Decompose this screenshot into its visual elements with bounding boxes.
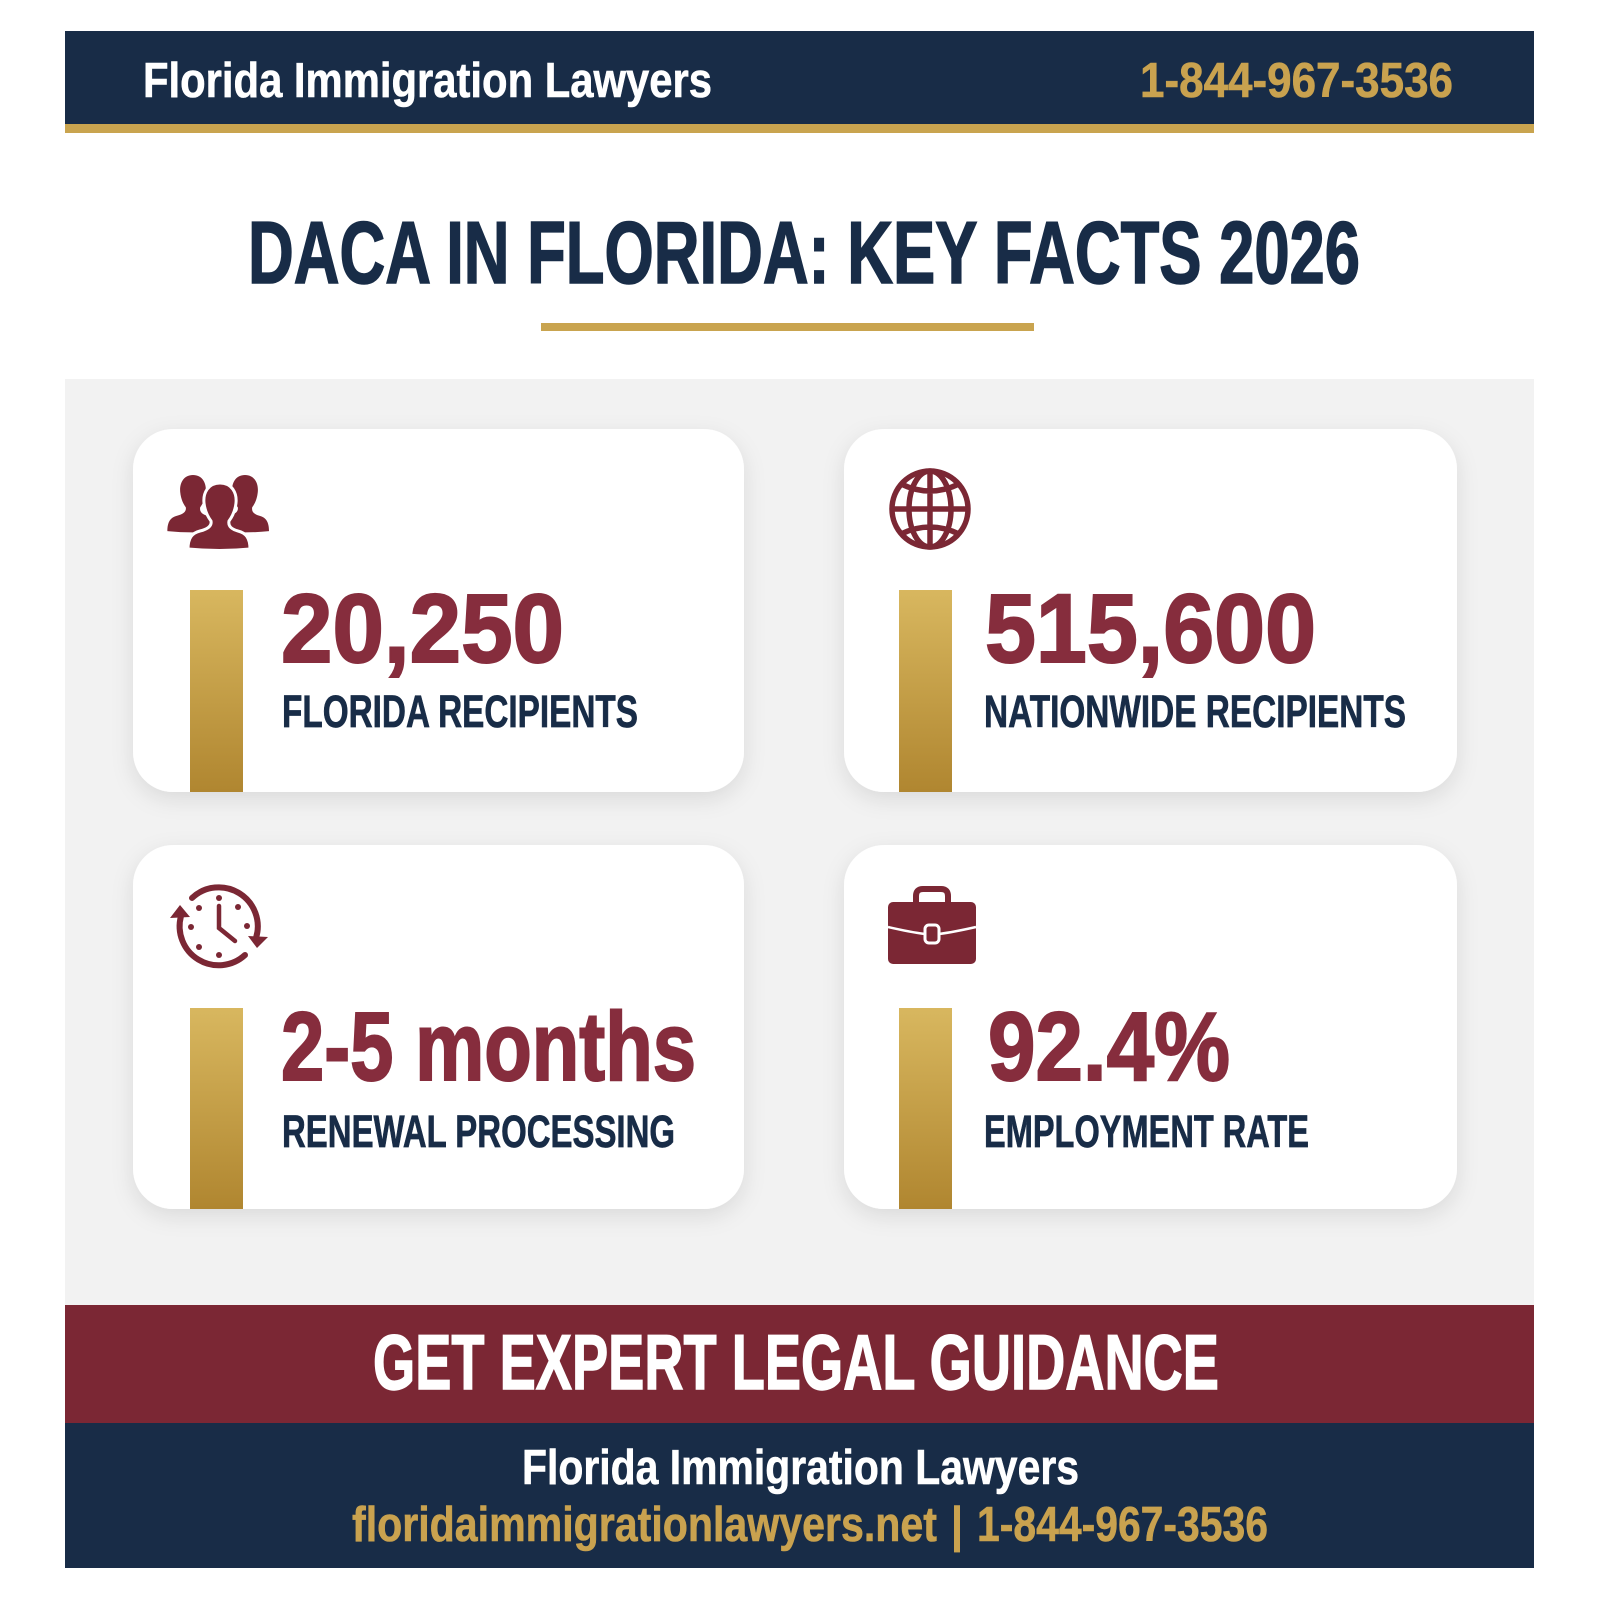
stat value: 20,250 bbox=[281, 574, 564, 683]
gold bar bbox=[190, 1008, 243, 1209]
card: Florida recipients bbox=[133, 429, 744, 792]
card: renewal processing bbox=[133, 845, 744, 1209]
header phone number: 1-844-967-3536 bbox=[1140, 54, 1453, 108]
gold bar bbox=[899, 590, 952, 792]
icon: globe bbox=[892, 471, 968, 547]
stat label: FLORIDA RECIPIENTS bbox=[282, 686, 638, 737]
stat label: NATIONWIDE RECIPIENTS bbox=[984, 686, 1406, 737]
icon: people bbox=[167, 475, 269, 550]
header firm name: Florida Immigration Lawyers bbox=[143, 54, 712, 108]
stat value: 2-5 months bbox=[281, 992, 696, 1101]
call to action text: GET EXPERT LEGAL GUIDANCE bbox=[373, 1318, 1219, 1406]
call to action banner bbox=[65, 1305, 1534, 1423]
header bar bbox=[65, 31, 1534, 133]
footer contact line: 1-844-967-3536 bbox=[977, 1498, 1268, 1552]
title underline bbox=[541, 323, 1034, 331]
footer contact line: floridaimmigrationlawyers.net bbox=[352, 1498, 937, 1552]
gold bar bbox=[190, 590, 243, 792]
stat label: EMPLOYMENT RATE bbox=[984, 1106, 1309, 1157]
card: nationwide recipients bbox=[844, 429, 1457, 792]
stat label: RENEWAL PROCESSING bbox=[282, 1106, 675, 1157]
footer bbox=[65, 1423, 1534, 1568]
stat value: 515,600 bbox=[985, 574, 1316, 683]
icon: briefcase bbox=[888, 889, 976, 964]
icon: clock with arrows bbox=[170, 887, 268, 965]
footer contact line: | bbox=[951, 1498, 963, 1552]
card: employment rate bbox=[844, 845, 1457, 1209]
footer firm name: Florida Immigration Lawyers bbox=[522, 1441, 1079, 1495]
gold bar bbox=[899, 1008, 952, 1209]
stat value: 92.4% bbox=[988, 992, 1230, 1101]
stats panel bbox=[65, 379, 1534, 1305]
